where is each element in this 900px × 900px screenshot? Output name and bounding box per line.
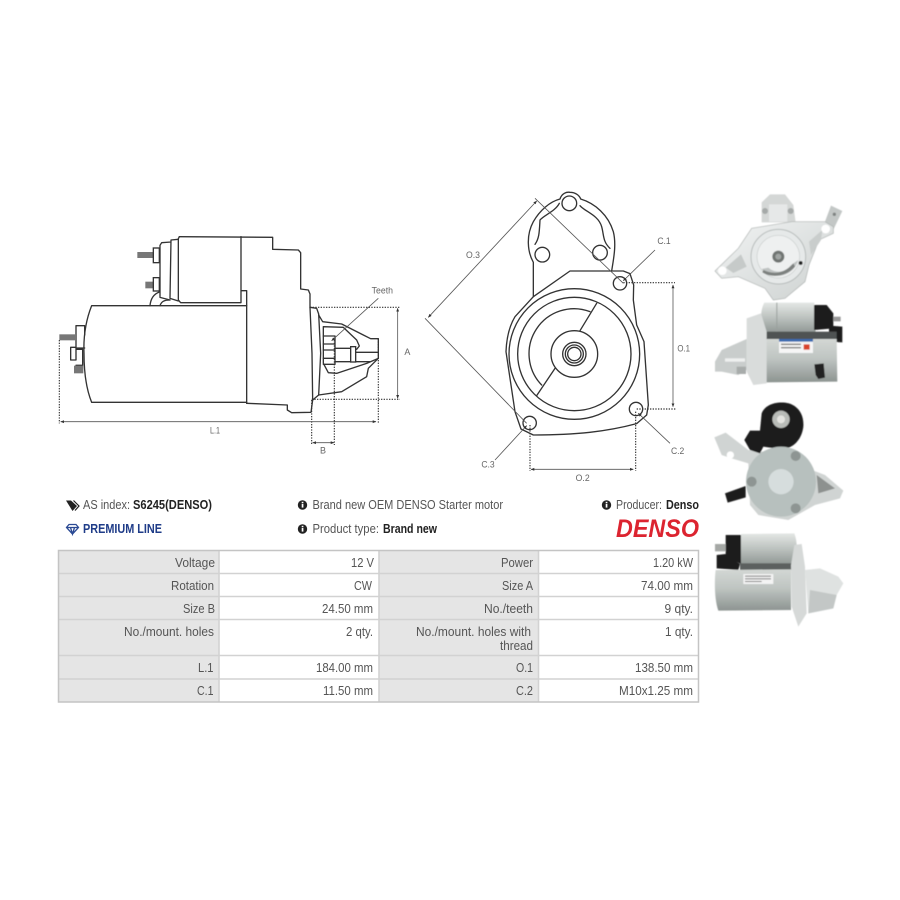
- info line: product type: Brand new: [383, 521, 438, 536]
- mounting flange: [506, 271, 648, 435]
- row: C.1 and C.2: [197, 683, 693, 698]
- photo: starter front view: [715, 194, 842, 300]
- premium line badge: PREMIUM LINE: [83, 521, 162, 536]
- row: voltage and power: 12 V: [351, 555, 374, 570]
- callout C.3: C.3: [481, 459, 495, 469]
- row: size B and teeth: Size B: [183, 601, 215, 616]
- dimension L.1: [59, 339, 378, 436]
- dimension A: [310, 307, 410, 399]
- row: size B and teeth: 9 qty.: [664, 601, 693, 616]
- row: voltage and power: Power: [501, 555, 534, 570]
- info line: producer: [602, 497, 699, 512]
- callout C.2: [638, 413, 684, 456]
- teeth callout: Teeth: [372, 285, 393, 295]
- dimension O.2: O.2: [576, 473, 590, 483]
- info line: AS index: [66, 497, 212, 512]
- callout C.1: C.1: [657, 236, 671, 246]
- upper bracket: [528, 192, 615, 297]
- row: C.1 and C.2: M10x1.25 mm: [619, 683, 693, 698]
- row: L.1 and O.1: 184.00 mm: [316, 660, 373, 675]
- callout C.3: [481, 426, 527, 469]
- callout C.2: C.2: [671, 446, 684, 456]
- row: mounting holes: No./mount. holes: [124, 624, 214, 639]
- row: mounting holes: No./mount. holes with: [416, 624, 531, 639]
- dimension B: [312, 340, 334, 456]
- specification table: [58, 550, 698, 702]
- dimension L.1: L.1: [210, 426, 220, 436]
- dimension O.3: [425, 198, 623, 423]
- photo: starter rear view: [714, 402, 843, 520]
- row: rotation and size A: Rotation: [171, 578, 214, 593]
- photo: starter side view with label: [715, 303, 842, 385]
- row: L.1 and O.1: O.1: [516, 660, 533, 675]
- row: voltage and power: Voltage: [175, 555, 215, 570]
- row: rotation and size A: CW: [354, 578, 373, 593]
- photo: starter opposite side view: [715, 533, 843, 627]
- info line: product type: [298, 521, 438, 536]
- logo: DENSO: DENSO: [616, 515, 700, 543]
- row: mounting holes: 2 qty.: [346, 624, 373, 639]
- row: C.1 and C.2: C.2: [516, 683, 533, 698]
- row: rotation and size A: 74.00 mm: [641, 578, 693, 593]
- info line: product description: Brand new OEM DENSO Starter motor: [312, 497, 504, 512]
- row: rotation and size A: Size A: [502, 578, 533, 593]
- row: size B and teeth: No./teeth: [484, 601, 533, 616]
- row: mounting holes: [124, 624, 693, 653]
- row: voltage and power: [175, 555, 694, 570]
- row: C.1 and C.2: 11.50 mm: [323, 683, 373, 698]
- dimension O.3: O.3: [466, 250, 480, 260]
- info line: producer: Denso: [666, 497, 699, 512]
- drive nose and pinion gear: [310, 307, 378, 400]
- row: C.1 and C.2: C.1: [197, 683, 214, 698]
- row: L.1 and O.1: [198, 660, 693, 675]
- dimension O.1: O.1: [677, 343, 690, 353]
- row: mounting holes: 1 qty.: [665, 624, 693, 639]
- motor body outline: [59, 306, 247, 402]
- dimension B: B: [320, 446, 326, 456]
- dimension O.1: [623, 283, 690, 409]
- row: L.1 and O.1: 138.50 mm: [635, 660, 693, 675]
- row: L.1 and O.1: L.1: [198, 660, 214, 675]
- callout C.1: [623, 236, 671, 281]
- info line: product type: Product type:: [312, 521, 379, 536]
- info line: AS index: S6245(DENSO): [133, 497, 212, 512]
- front view technical drawing: [425, 192, 690, 483]
- row: rotation and size A: [171, 578, 693, 593]
- side view technical drawing: [59, 237, 410, 456]
- row: size B and teeth: 24.50 mm: [322, 601, 373, 616]
- row: voltage and power: 1.20 kW: [653, 555, 694, 570]
- dimension A: A: [404, 347, 410, 357]
- nose circles and shaft: [509, 289, 640, 419]
- teeth callout: [332, 285, 393, 341]
- solenoid and drive housing outline: [137, 237, 313, 413]
- info line: producer: Producer:: [616, 497, 662, 512]
- row: size B and teeth: [183, 601, 693, 616]
- row: mounting holes: thread: [500, 638, 533, 653]
- dimension O.2: [530, 412, 636, 483]
- info line: AS index: AS index:: [83, 497, 130, 512]
- table cell backgrounds: [58, 550, 698, 702]
